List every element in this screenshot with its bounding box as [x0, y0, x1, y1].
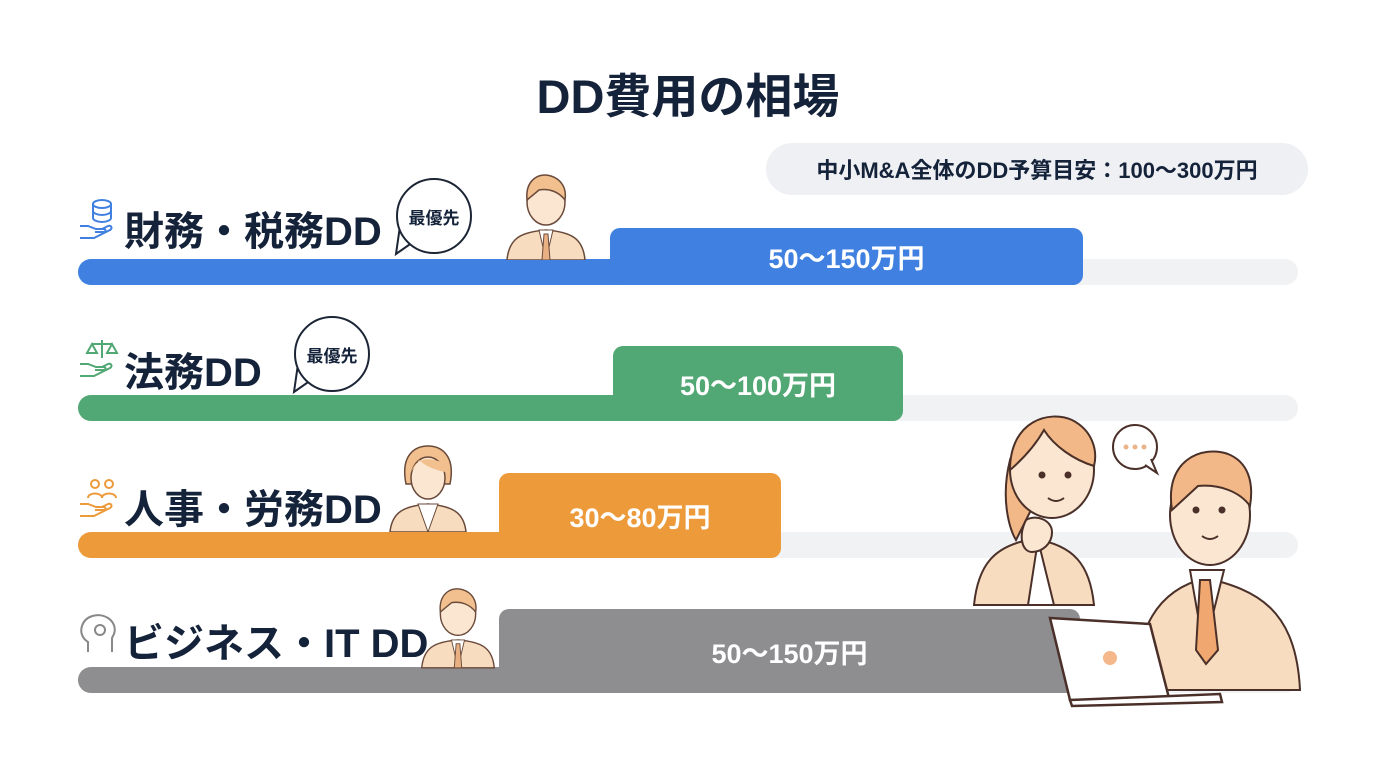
callout: total budget: 中小M&A全体のDD予算目安：100〜300万円 [816, 158, 1258, 183]
icon: coins hand [80, 199, 112, 239]
row: HR [78, 445, 1298, 558]
bar: legal: 50〜100万円 [680, 371, 836, 401]
bar: business IT [499, 609, 1080, 693]
title: DD費用の相場 [537, 70, 839, 123]
icon: people hand [80, 479, 117, 517]
man [1136, 452, 1300, 690]
label: 人事・労務DD [124, 488, 382, 532]
row: finance [78, 174, 1298, 285]
bar: business IT: 50〜150万円 [711, 638, 868, 668]
icon: head gear [80, 614, 116, 652]
icon: man [506, 174, 586, 260]
callout: total budget [766, 143, 1308, 195]
bubble: priority [292, 316, 370, 394]
bar: finance: 50〜150万円 [768, 244, 925, 274]
woman [974, 417, 1095, 605]
label: 財務・税務DD [124, 210, 382, 254]
row: legal [78, 316, 1298, 421]
bar: finance [610, 228, 1083, 285]
icon: man small [421, 588, 495, 668]
bubble: priority: 最優先 [408, 208, 460, 228]
label: ビジネス・IT DD [124, 622, 428, 666]
bubble: priority [394, 178, 472, 256]
bar: HR: 30〜80万円 [569, 503, 711, 533]
icon: woman [389, 445, 467, 532]
label: 法務DD [124, 351, 262, 395]
row: business IT [78, 588, 1292, 693]
bubble: priority: 最優先 [306, 346, 358, 366]
speech bubble [1113, 425, 1157, 473]
laptop [1050, 618, 1222, 706]
bar: legal [613, 346, 903, 421]
bar: HR [499, 473, 781, 558]
illustration: two business people with laptop [972, 416, 1302, 708]
icon: scales hand [80, 340, 119, 377]
